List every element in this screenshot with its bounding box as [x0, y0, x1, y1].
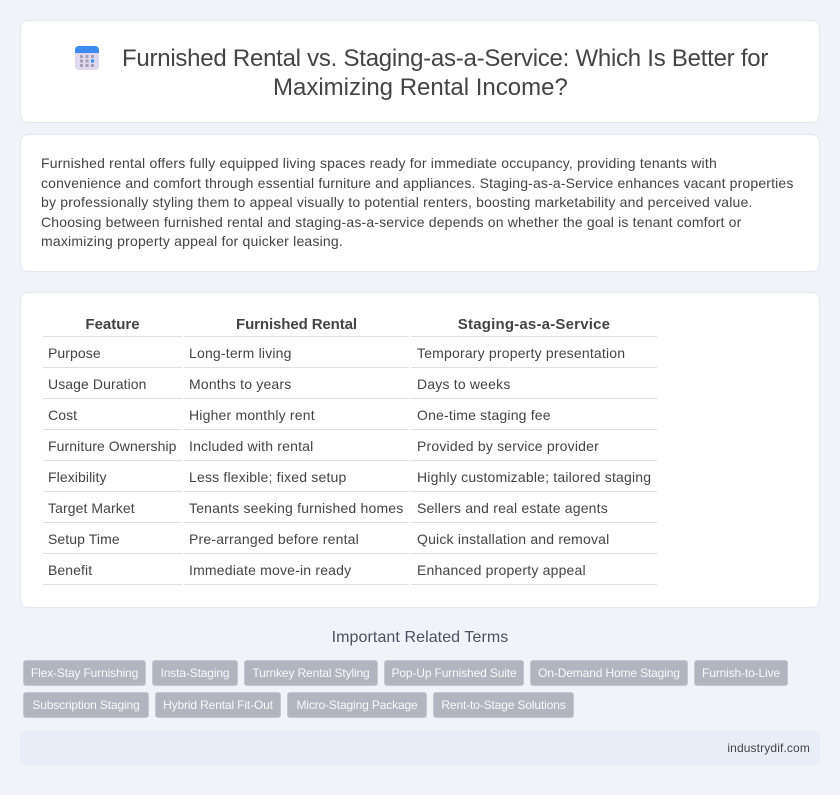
comparison table: Months to years: [189, 376, 291, 392]
comparison table: Highly customizable; tailored staging: [417, 469, 651, 485]
intro text: maximizing property appeal for quicker leasing.: [41, 233, 343, 249]
comparison table: Pre-arranged before rental: [189, 531, 359, 547]
related term tags: Insta-Staging: [161, 666, 229, 680]
comparison table: Provided by service provider: [417, 438, 599, 454]
related term tags: Micro-Staging Package: [296, 698, 418, 712]
intro text: [41, 155, 793, 249]
intro text: Choosing between furnished rental and staging-as-a-service depends on whether the goal is tenant comfort or: [41, 214, 741, 230]
comparison table: Setup Time: [48, 531, 120, 547]
title: Furnished Rental vs. Staging-as-a-Service: Which Is Better for: [122, 45, 768, 72]
comparison table: [43, 316, 657, 585]
title: [122, 45, 768, 101]
related term tags: Flex-Stay Furnishing: [31, 666, 138, 680]
comparison table: Target Market: [48, 500, 135, 516]
comparison table: Included with rental: [189, 438, 313, 454]
related term tags: Hybrid Rental Fit-Out: [163, 698, 273, 712]
comparison table: Staging-as-a-Service: [458, 316, 610, 333]
panel: intro card: [20, 134, 820, 272]
comparison table: Tenants seeking furnished homes: [189, 500, 403, 516]
related term tags: [23, 660, 788, 718]
comparison table: One-time staging fee: [417, 407, 551, 423]
related term tags: Furnish-to-Live: [702, 666, 780, 680]
related term tags: Turnkey Rental Styling: [252, 666, 370, 680]
related term tags: Subscription Staging: [32, 698, 140, 712]
comparison table: Furniture Ownership: [48, 438, 177, 454]
comparison table: Long-term living: [189, 345, 292, 361]
intro text: Furnished rental offers fully equipped living spaces ready for immediate occupancy, providing tenants with: [41, 155, 717, 171]
panel: title card: [20, 20, 820, 123]
intro text: by professionally styling them to appeal visually to potential renters, boosting marketability and perceived value.: [41, 194, 753, 210]
comparison table: Immediate move-in ready: [189, 562, 351, 578]
comparison table: Days to weeks: [417, 376, 511, 392]
comparison table: Enhanced property appeal: [417, 562, 586, 578]
comparison table: Quick installation and removal: [417, 531, 609, 547]
heading: important related terms: Important Related Terms: [332, 629, 508, 646]
comparison table: Temporary property presentation: [417, 345, 625, 361]
comparison table: Higher monthly rent: [189, 407, 315, 423]
comparison table: Less flexible; fixed setup: [189, 469, 346, 485]
related term tags: On-Demand Home Staging: [538, 666, 680, 680]
comparison table: Furnished Rental: [236, 316, 357, 333]
comparison table: Cost: [48, 407, 77, 423]
panel: comparison table card: [20, 292, 820, 608]
icon: calendar: [75, 46, 99, 70]
footer source text: industrydif.com: [727, 741, 810, 755]
title: Maximizing Rental Income?: [273, 74, 568, 101]
intro text: convenience and comfort through essential furniture and appliances. Staging-as-a-Service enhances vacant properties: [41, 175, 793, 191]
related term tags: Pop-Up Furnished Suite: [392, 666, 516, 680]
footer bar: [20, 731, 820, 765]
comparison table: Usage Duration: [48, 376, 147, 392]
comparison table: Flexibility: [48, 469, 107, 485]
comparison table: Feature: [85, 316, 140, 333]
comparison table: Benefit: [48, 562, 92, 578]
comparison table: Purpose: [48, 345, 101, 361]
related term tags: Rent-to-Stage Solutions: [441, 698, 566, 712]
comparison table: Sellers and real estate agents: [417, 500, 608, 516]
